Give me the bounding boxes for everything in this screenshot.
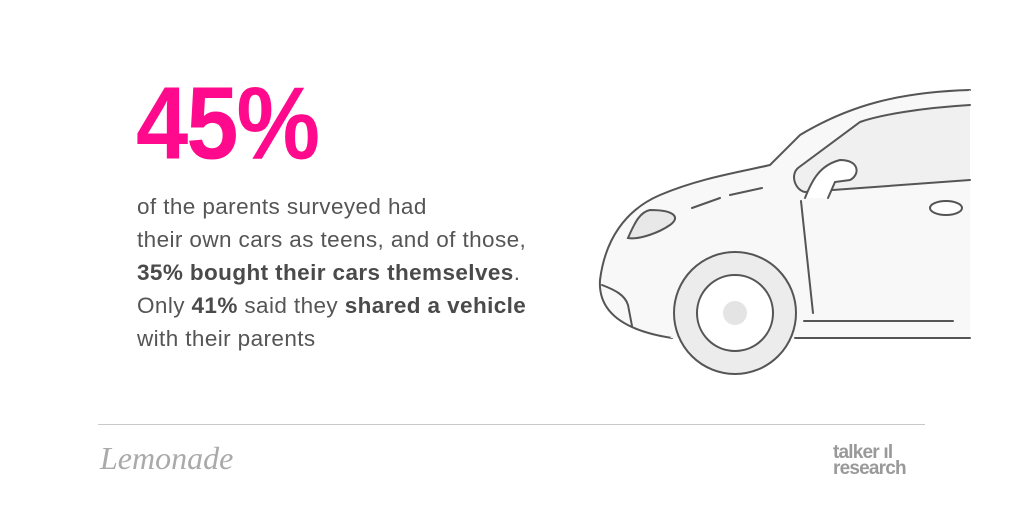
body text: with their parents <box>137 326 316 351</box>
body text: of the parents surveyed had <box>137 194 427 219</box>
body text: 35% bought their cars themselves. <box>137 260 520 285</box>
logo: talker research: research <box>833 458 906 479</box>
body text <box>137 194 526 351</box>
body text: their own cars as teens, and of those, <box>137 227 526 252</box>
logo: Lemonade: Lemonade <box>100 440 233 476</box>
headline stat: 45% <box>136 65 318 180</box>
logo: talker research: talker ıl <box>833 442 892 463</box>
logo: talker research <box>833 442 906 479</box>
body text: Only 41% said they shared a vehicle <box>137 293 526 318</box>
